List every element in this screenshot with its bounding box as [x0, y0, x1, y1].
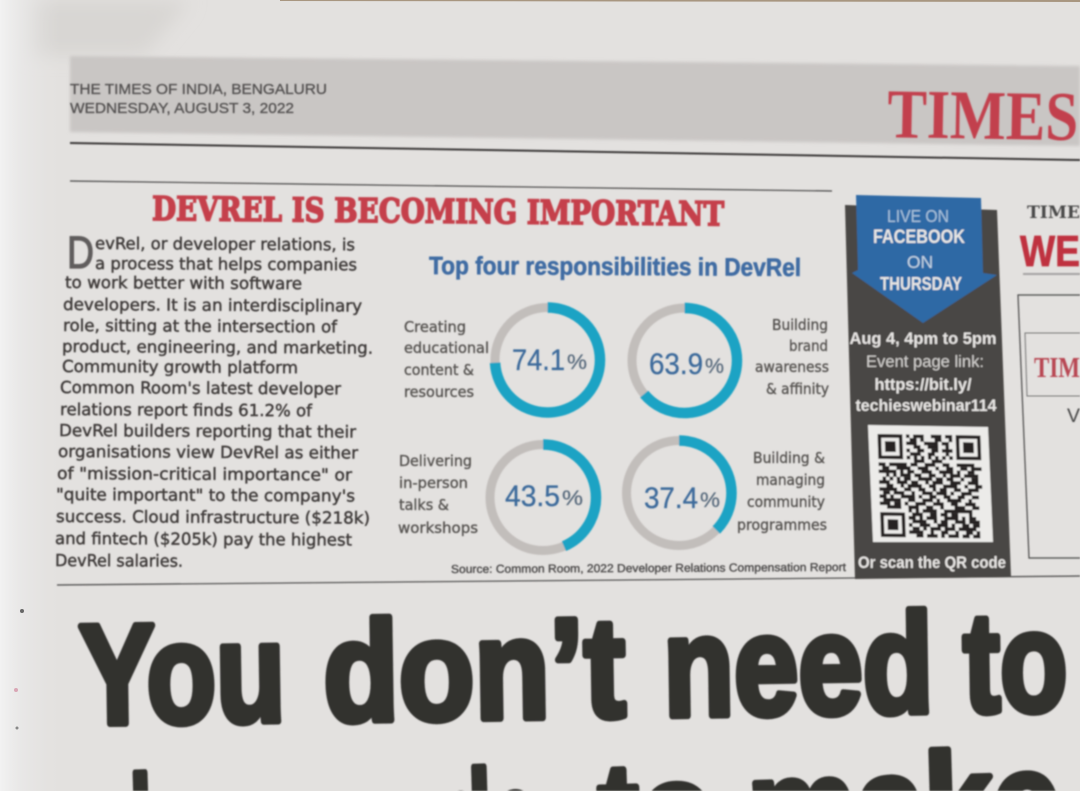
icon: blue down arrow with event heading: LIVE ON	[887, 206, 949, 226]
donut: building and managing community 37.4%: community	[747, 493, 825, 511]
donut: building brand awareness 63.9%: %	[705, 355, 724, 378]
article body text: product, engineering, and marketing.	[62, 337, 373, 358]
event details	[850, 329, 997, 415]
donut: building brand awareness 63.9%: 63.9	[649, 348, 703, 381]
masthead dateline: WEDNESDAY, AUGUST 3, 2022	[70, 100, 294, 117]
drop cap: D	[67, 227, 94, 278]
event details: https://bit.ly/	[874, 376, 972, 394]
donut: delivering in-person talks 43.5%: workshops	[398, 519, 478, 537]
QR code	[868, 425, 993, 542]
donut: creating educational content 74.1%: resources	[404, 383, 474, 401]
donut: creating educational content 74.1%: Creating	[404, 318, 466, 336]
title: DEVREL IS BECOMING IMPORTANT	[152, 189, 725, 233]
headline second line, cropped by the page edge	[128, 721, 1063, 791]
donut: building and managing community 37.4%: %	[700, 489, 720, 512]
chart heading: Top four responsibilities in DevRel	[429, 252, 801, 282]
article body text: Community growth platform	[62, 357, 298, 377]
donut: building and managing community 37.4%: managing	[756, 471, 825, 489]
icon: blue down arrow with event heading	[852, 195, 997, 323]
donut: delivering in-person talks 43.5%: talks &	[399, 496, 449, 514]
donut: building and managing community 37.4%: Building &	[753, 449, 825, 467]
donut: building and managing community 37.4%	[626, 440, 827, 546]
article body text: developers. It is an interdisciplinary	[63, 295, 362, 316]
article body text: evRel, or developer relations, is	[95, 234, 355, 254]
large headline below	[78, 582, 1068, 791]
icon: blue down arrow with event heading: FACEBOOK	[873, 227, 965, 248]
masthead dateline: THE TIMES OF INDIA, BENGALURU	[70, 81, 327, 98]
donut: creating educational content 74.1%: %	[567, 351, 587, 374]
icon: blue down arrow with event heading: THURSDAY	[880, 274, 962, 294]
donut: delivering in-person talks 43.5%: Delivering	[399, 452, 472, 470]
article body text: a process that helps companies	[95, 254, 357, 274]
article body text: success. Cloud infrastructure ($218k)	[56, 507, 370, 528]
donut: creating educational content 74.1%: 74.1	[512, 344, 565, 377]
donut: building brand awareness 63.9%: Building	[772, 316, 828, 334]
donut: delivering in-person talks 43.5%: 43.5	[505, 480, 560, 513]
neighbouring column: cropped ad: TIME	[1027, 203, 1080, 223]
donut: building and managing community 37.4%: 37.4	[644, 482, 698, 515]
donut: delivering in-person talks 43.5%: %	[562, 487, 583, 510]
article body text: to work better with software	[65, 273, 302, 293]
article body text: Common Room's latest developer	[60, 378, 341, 398]
large headline below: don’t	[322, 589, 626, 752]
article body text: of "mission-critical importance" or	[57, 464, 352, 485]
neighbouring column: cropped ad: V	[1067, 406, 1080, 427]
article body text: role, sitting at the intersection of	[63, 316, 338, 336]
event details: Event page link:	[866, 353, 984, 371]
article body text	[55, 227, 373, 571]
icon: blue down arrow with event heading: ON	[907, 252, 933, 272]
event details: Aug 4, 4pm to 5pm	[850, 329, 996, 348]
donut: building and managing community 37.4%: programmes	[737, 516, 827, 534]
donut: delivering in-person talks 43.5%: in-person	[399, 474, 468, 492]
donut: building brand awareness 63.9%: brand	[789, 337, 828, 355]
donut: creating educational content 74.1%: content &	[404, 361, 474, 379]
QR caption: Or scan the QR code	[858, 553, 1006, 572]
webinar panel	[845, 195, 1011, 579]
event details: techieswebinar114	[856, 396, 997, 415]
article body text: organisations view DevRel as either	[58, 442, 358, 463]
article body text: DevRel salaries.	[55, 551, 183, 571]
donut: building brand awareness 63.9%	[632, 308, 829, 413]
masthead dateline	[70, 81, 327, 117]
large headline below: You	[78, 593, 286, 755]
article body text: "quite important" to the company's	[56, 485, 355, 506]
donut: building brand awareness 63.9%: & affinity	[766, 380, 829, 398]
large headline below: need	[662, 584, 934, 747]
donut: creating educational content 74.1%	[404, 308, 600, 412]
donut: building brand awareness 63.9%: awareness	[755, 358, 829, 376]
article body text: and fintech ($205k) pay the highest	[55, 529, 353, 550]
source note: Source: Common Room, 2022 Developer Relations Compensation Report	[451, 562, 847, 576]
article body text: relations report finds 61.2% of	[60, 400, 313, 420]
donut: creating educational content 74.1%: educational	[404, 339, 489, 357]
donut: delivering in-person talks 43.5%	[398, 444, 596, 550]
article body text: DevRel builders reporting that their	[59, 421, 356, 442]
neighbouring column: cropped ad	[1018, 203, 1080, 558]
